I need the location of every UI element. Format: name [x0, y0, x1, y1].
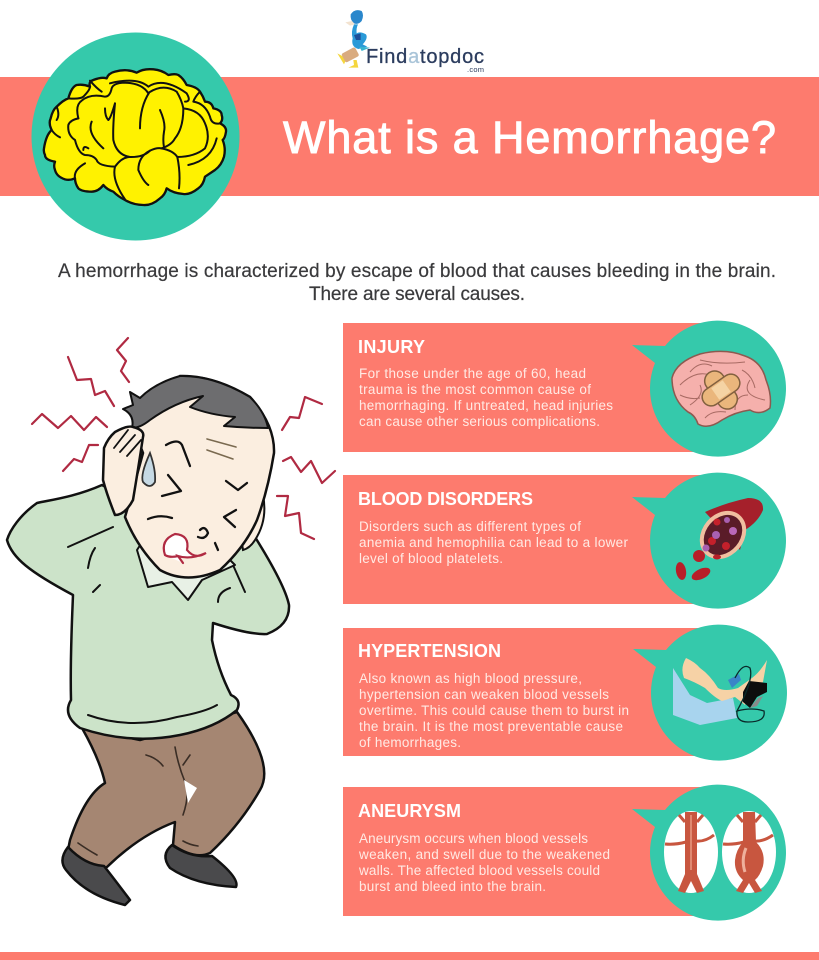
description: Disorders such as different types of — [359, 519, 581, 534]
description: overtime. This could cause them to burst in — [359, 703, 629, 718]
left shoe — [62, 847, 130, 905]
mouth — [164, 534, 206, 563]
panel: blood disorders — [343, 473, 786, 609]
trousers — [68, 712, 264, 869]
sweater — [7, 485, 289, 739]
head — [125, 376, 274, 578]
speech bubble — [632, 321, 786, 457]
description — [358, 831, 610, 894]
speech bubble — [633, 625, 787, 761]
footer bar — [0, 952, 819, 960]
logo wordmark: Findatopdoc — [366, 46, 484, 68]
card background — [343, 787, 703, 916]
card background — [343, 323, 703, 452]
speech bubble — [632, 785, 786, 921]
description: burst and bleed into the brain. — [359, 879, 546, 894]
shirt collar — [137, 530, 235, 600]
description: weaken, and swell due to the weakened — [358, 847, 610, 862]
description: For those under the age of 60, head — [359, 366, 586, 381]
description: Aneurysm occurs when blood vessels — [359, 831, 588, 846]
description: walls. The affected blood vessels could — [358, 863, 600, 878]
heading: BLOOD DISORDERS — [358, 489, 533, 509]
header banner — [0, 77, 819, 196]
icon: blood pressure arm — [673, 658, 767, 725]
icon: aneurysm artery — [722, 811, 776, 893]
ear — [240, 495, 264, 550]
fingers — [114, 430, 141, 456]
description — [359, 366, 613, 429]
gap between legs — [184, 780, 197, 803]
description: anemia and hemophilia can lead to a lower — [359, 535, 628, 550]
panel: aneurysm — [343, 785, 786, 921]
description: the brain. It is the most preventable cause — [359, 719, 623, 734]
description: level of blood platelets. — [359, 551, 503, 566]
card background — [343, 628, 703, 756]
panel: injury — [343, 321, 786, 457]
description: of hemorrhages. — [359, 735, 461, 750]
heading: INJURY — [358, 337, 425, 357]
intro text: There are several causes. — [309, 284, 525, 305]
description — [359, 671, 629, 750]
card background — [343, 475, 703, 604]
heading: HYPERTENSION — [358, 641, 501, 661]
icon: duck mascot — [337, 10, 370, 68]
description: hypertension can weaken blood vessels — [359, 687, 609, 702]
intro text — [58, 261, 776, 305]
sweater folds — [68, 527, 245, 723]
description: Also known as high blood pressure, — [359, 671, 582, 686]
right shoe — [165, 845, 236, 887]
panel: hypertension — [343, 625, 787, 761]
description — [359, 519, 628, 566]
face features — [148, 439, 247, 550]
pain lightning marks — [32, 338, 335, 539]
illustration: man with headache — [7, 338, 335, 905]
logo — [337, 10, 484, 74]
description: trauma is the most common cause of — [359, 382, 591, 397]
icon: yellow brain in teal circle — [32, 32, 240, 240]
icon: blood vessel — [675, 498, 763, 583]
speech bubble — [632, 473, 786, 609]
icon: bandaged brain — [672, 351, 770, 426]
hand — [103, 427, 143, 515]
logo domain: .com — [467, 65, 484, 74]
heading: ANEURYSM — [358, 801, 461, 821]
description: hemorrhaging. If untreated, head injuries — [359, 398, 613, 413]
intro text: A hemorrhage is characterized by escape of blood that causes bleeding in the brain. — [58, 261, 776, 282]
trouser creases — [78, 747, 198, 855]
icon: normal artery — [664, 811, 718, 893]
title: What is a Hemorrhage? — [283, 112, 776, 163]
hair — [123, 376, 268, 428]
description: can cause other serious complications. — [359, 414, 600, 429]
tear drop — [142, 453, 155, 486]
